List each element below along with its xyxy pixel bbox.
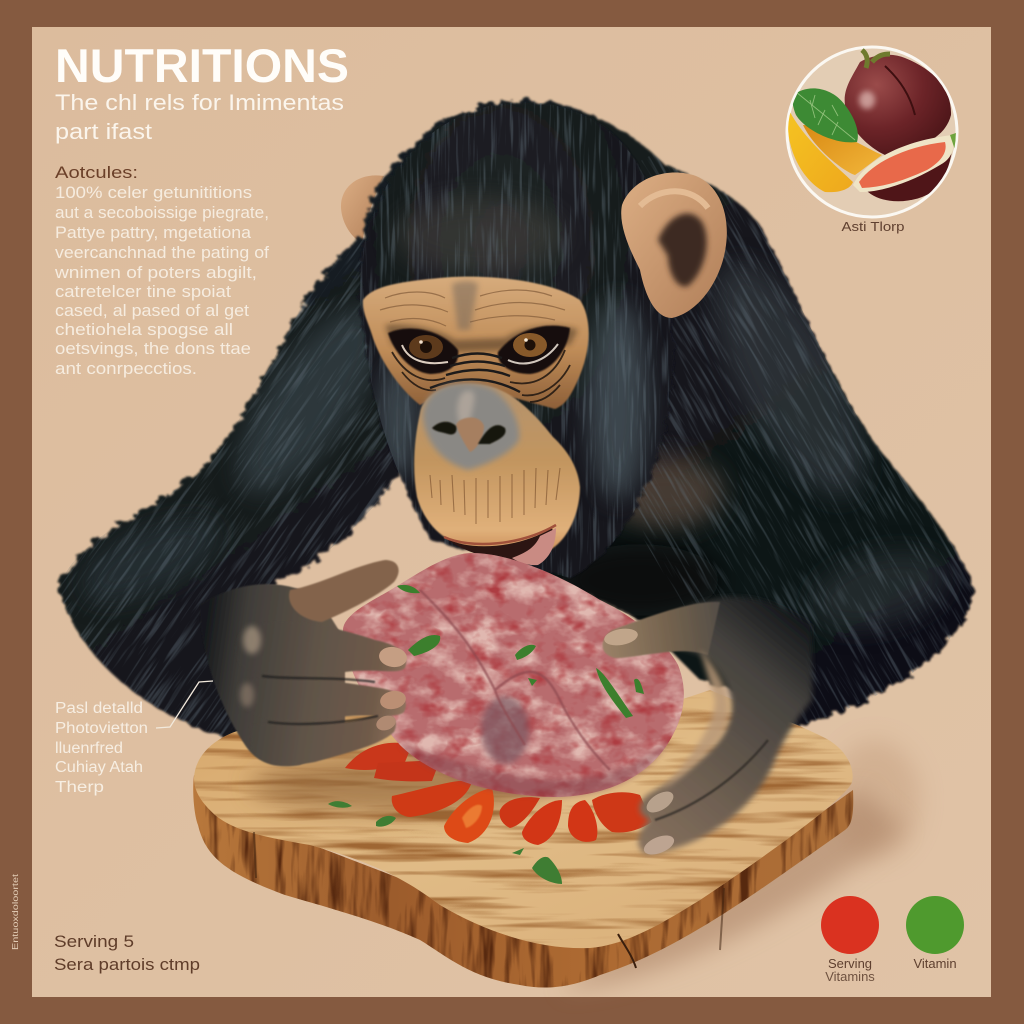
hand and meat shadow: [250, 757, 550, 813]
wrist and palm: [200, 584, 345, 766]
fur strands: right arm direction: [636, 154, 974, 725]
subtitle line one: The chl rels for Imimentas: [55, 90, 344, 115]
wrinkles between eyes: [430, 354, 520, 392]
side annotation text: Pasl detalld: [55, 700, 143, 717]
knuckle highlight: [243, 626, 261, 654]
legend: vitamin: Vitamin: [913, 956, 957, 971]
brow shadow: [385, 324, 578, 352]
ingredients body: [54, 183, 269, 378]
nose pad: [423, 383, 519, 470]
back of hand: [638, 597, 812, 854]
vertical margin caption: Entuoxdoloortet: [10, 873, 20, 950]
left eye: [402, 335, 448, 363]
leaf: [793, 88, 858, 142]
dark torso: [560, 544, 720, 616]
herbs on meat: [397, 585, 644, 718]
fig stem: [862, 50, 890, 68]
herb flakes on board: [328, 801, 562, 884]
under-eye wrinkles: [392, 350, 570, 402]
ingredients body: wnimen of poters abgilt,: [54, 263, 257, 282]
left hand: [200, 560, 408, 766]
legend: serving vitamins: [821, 896, 879, 984]
mango slice: [803, 125, 882, 175]
brow wrinkles: [380, 290, 565, 326]
fur highlight: right forearm: [812, 548, 950, 634]
ear rim: [640, 191, 708, 208]
finger creases: [262, 676, 378, 724]
ear hollow: [658, 214, 707, 287]
nostril right: [478, 425, 506, 444]
index nail: [378, 645, 408, 669]
board shadow: [560, 790, 905, 990]
fig highlight: [859, 91, 875, 109]
right eye: [508, 333, 558, 363]
ingredients text block: [54, 163, 269, 378]
right cheek fur: [588, 300, 648, 500]
legend: [821, 896, 964, 984]
finger crease: [655, 740, 768, 820]
fur highlight: left forearm: [68, 516, 218, 604]
leader line: [156, 681, 213, 728]
lower finger nail: [641, 832, 677, 858]
fur highlight: left arm: [232, 302, 371, 498]
fruit group: [788, 50, 956, 201]
leaf vein: [796, 92, 855, 140]
ingredients body: ant conrpecctios.: [55, 359, 197, 378]
meat patty: [343, 553, 684, 797]
legend: serving vitamins: Serving: [828, 956, 872, 971]
inset circle: [787, 47, 957, 217]
middle finger: [237, 677, 406, 721]
subtitle line two: part ifast: [55, 119, 153, 144]
ingredients body: catretelcer tine spoiat: [55, 282, 231, 301]
inset caption: Asti Tlorp: [842, 220, 905, 234]
chimpanzee body: [56, 95, 977, 738]
nostril left: [432, 422, 457, 435]
thumb nail: [603, 626, 639, 648]
side annotation text: lluenrfred: [55, 740, 123, 757]
ring nail: [374, 713, 398, 733]
head fur: [360, 102, 674, 578]
pale fat marbling: [343, 553, 684, 797]
cut fruit skin: [866, 150, 952, 201]
side annotation text: Cuhiay Atah: [55, 759, 143, 776]
board side grain: [193, 775, 853, 988]
ingredients body: aut a secoboissige piegrate,: [55, 203, 269, 222]
left eye socket: [388, 328, 458, 374]
cutting board: [193, 690, 905, 990]
legend: serving vitamins: Vitamins: [825, 969, 875, 984]
title: NUTRITIONS: [55, 39, 349, 92]
brown chest patch: [607, 456, 723, 528]
serving text: Sera partois ctmp: [54, 956, 200, 974]
serving text: Serving 5: [54, 933, 134, 951]
head: [350, 90, 727, 590]
muzzle: [414, 384, 580, 555]
upper finger nail: [643, 787, 677, 817]
grey centre: [481, 696, 529, 764]
ingredients heading: Aotcules:: [55, 163, 138, 182]
knuckle highlight 2: [240, 683, 254, 707]
mouth: [445, 528, 553, 562]
fur silhouette: [58, 100, 975, 745]
ring finger: [250, 714, 396, 764]
middle nail: [378, 688, 408, 712]
fig: [845, 55, 951, 155]
forehead sheen: [395, 197, 565, 273]
right hand: [603, 597, 812, 858]
right ear: [621, 173, 727, 318]
meat base: [343, 553, 684, 797]
left ear: [341, 175, 384, 243]
red peppers: [345, 743, 652, 845]
fur highlight: right shoulder: [711, 260, 874, 502]
face mask: [363, 277, 589, 409]
lower meat shade: [400, 740, 670, 797]
cut fruit flesh: [859, 142, 946, 188]
fur strands: left arm direction: [58, 238, 394, 736]
ingredients body: 100% celer getunititions: [55, 183, 252, 202]
cut fruit green tip: [950, 133, 956, 150]
board top grain: [194, 690, 853, 948]
red marbling: [343, 553, 684, 797]
cut fruit rind: [853, 135, 954, 192]
upper lip: [444, 525, 556, 544]
ingredients body: chetiohela spogse all: [55, 320, 233, 339]
ground shadow: [830, 740, 920, 860]
thumb: [289, 560, 399, 622]
muzzle hair: [430, 468, 560, 524]
legend: vitamin: [906, 896, 964, 971]
ingredients body: cased, al pased of al get: [55, 301, 249, 320]
palm tan band: [660, 650, 729, 792]
lower lip: [512, 528, 556, 565]
ingredients body: veercanchnad the pating of: [55, 243, 269, 262]
nose tip: [456, 417, 484, 452]
meat creases: [420, 590, 610, 770]
side annotation text: Photovietton: [55, 720, 148, 737]
left cheek fur: [378, 360, 418, 480]
board side: [193, 775, 853, 988]
fig crease: [885, 66, 915, 115]
ingredients body: Pattye pattry, mgetationa: [55, 223, 252, 242]
heading block: [55, 39, 349, 144]
index finger: [235, 622, 406, 676]
head fur strands: [360, 102, 670, 578]
side annotation text: Therp: [55, 779, 104, 796]
serving text: [54, 933, 200, 974]
banana: [788, 112, 853, 192]
nose highlight: [457, 390, 475, 432]
fruit inset: [787, 47, 957, 234]
ingredients body: oetsvings, the dons ttae: [55, 339, 251, 358]
centre nose bridge: [452, 281, 478, 330]
side annotation text: [55, 700, 148, 796]
board cracks: [254, 832, 724, 968]
board top: [194, 690, 853, 948]
thumb: [603, 602, 720, 658]
right eye socket: [498, 326, 570, 374]
head shading, clipped to head: [360, 102, 670, 578]
